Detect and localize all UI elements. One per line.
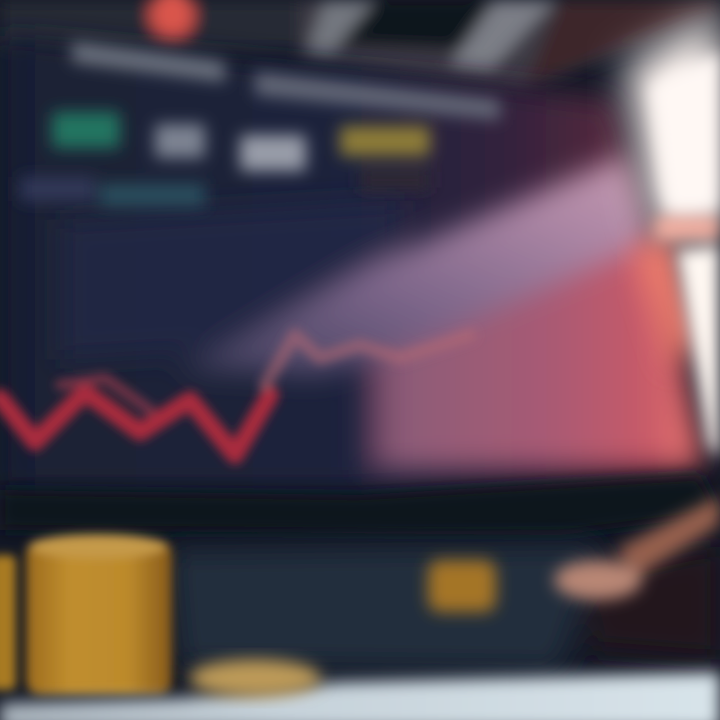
- coin stack: [0, 534, 172, 695]
- panel: rising band: [180, 155, 650, 375]
- hand: [554, 495, 720, 600]
- panel: trading screen: [0, 35, 700, 490]
- small coin stack: [428, 560, 496, 612]
- dark bezel: [0, 475, 720, 535]
- window glare: [625, 10, 720, 225]
- top frame: [0, 0, 720, 90]
- heading bar on screen: [72, 42, 500, 120]
- salmon glow: [635, 225, 695, 370]
- ticker buttons: [20, 112, 430, 206]
- bottom surface: [0, 672, 720, 720]
- panel: lower chart area: [365, 240, 700, 470]
- panel: lit chart area: [60, 155, 700, 470]
- window lower: [650, 50, 720, 460]
- keyboard: [170, 545, 720, 670]
- flat coin: [189, 659, 321, 697]
- line chart: red zigzag: [0, 335, 470, 455]
